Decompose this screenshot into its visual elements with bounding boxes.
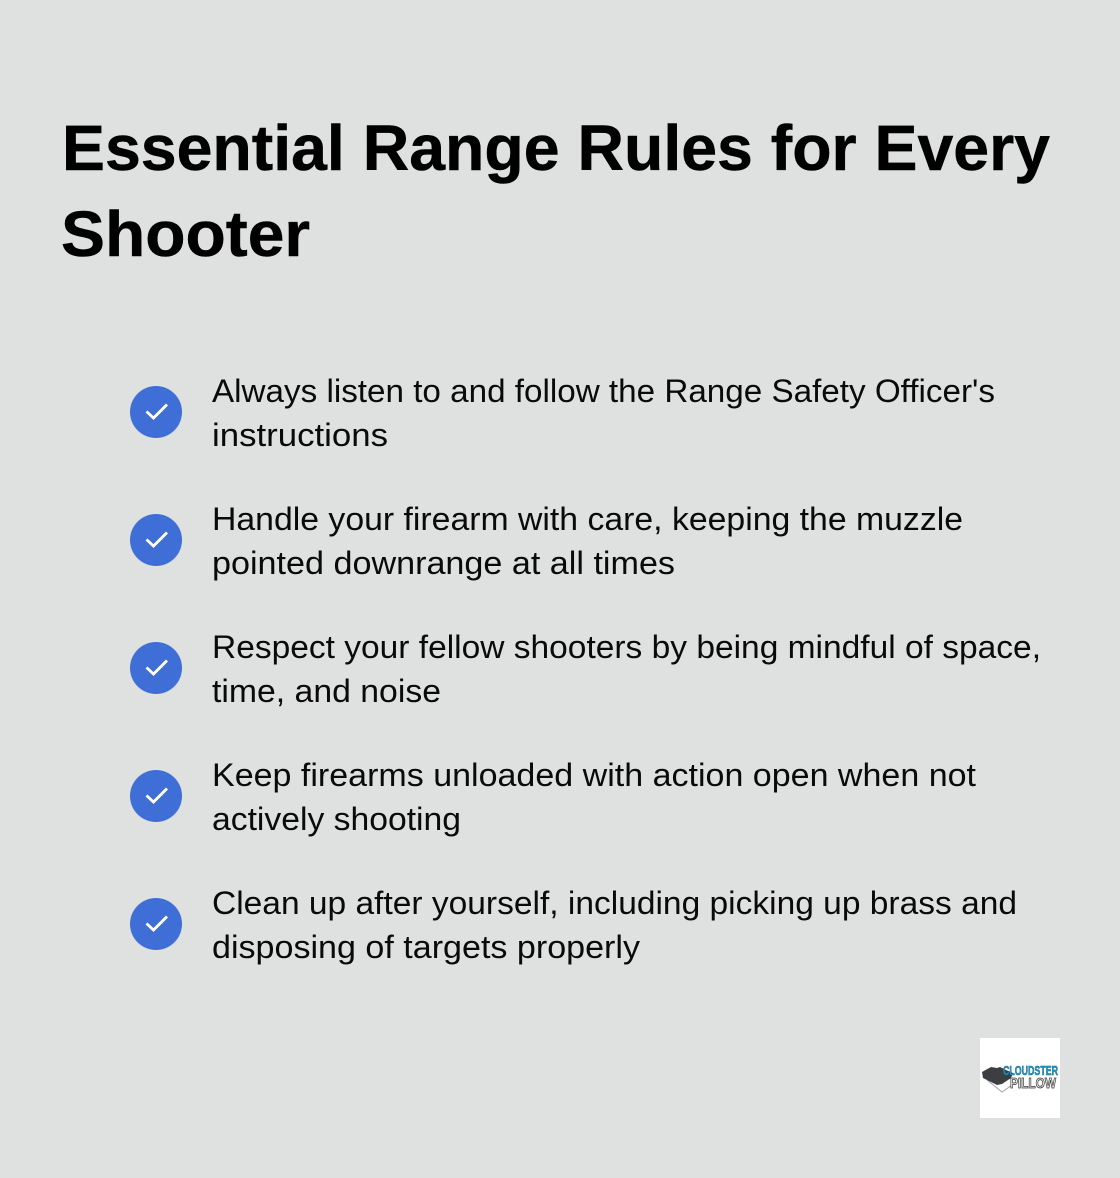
- icon: check 1: [130, 386, 182, 438]
- rule 1 text: Always listen to and follow the Range Safety Officer's: [212, 373, 995, 409]
- rule 5 text: [212, 885, 1017, 965]
- rule 3: [130, 629, 1041, 709]
- logo wordmark: PILLOW: [1010, 1075, 1057, 1092]
- icon: check 2: [130, 514, 182, 566]
- rule 1: [130, 373, 995, 453]
- logo: [980, 1038, 1060, 1118]
- logo wordmark: [1003, 1064, 1058, 1092]
- rule 4 text: actively shooting: [212, 801, 461, 837]
- icon: check 5: [130, 898, 182, 950]
- rule 2 text: [212, 501, 963, 581]
- rule 3 text: time, and noise: [212, 673, 441, 709]
- title: [61, 112, 1050, 270]
- logo wordmark: CLOUDSTER: [1003, 1064, 1058, 1078]
- rule 1 text: instructions: [212, 417, 388, 453]
- rule 5 text: disposing of targets properly: [212, 929, 640, 965]
- rule 3 text: Respect your fellow shooters by being mindful of space,: [212, 629, 1041, 665]
- icon: check 4: [130, 770, 182, 822]
- rule 2: [130, 501, 963, 581]
- rule 5 text: Clean up after yourself, including picking up brass and: [212, 885, 1017, 921]
- rule 3 text: [212, 629, 1041, 709]
- rule 5: [130, 885, 1017, 965]
- title: Essential Range Rules for Every: [62, 112, 1050, 184]
- rule 2 text: pointed downrange at all times: [212, 545, 675, 581]
- rule 2 text: Handle your firearm with care, keeping the muzzle: [212, 501, 963, 537]
- rule 4: [130, 757, 976, 837]
- icon: pillow: [982, 1067, 1013, 1092]
- icon: check 3: [130, 642, 182, 694]
- rule 4 text: Keep firearms unloaded with action open when not: [212, 757, 976, 793]
- rule 4 text: [212, 757, 976, 837]
- rule 1 text: [212, 373, 995, 453]
- title: Shooter: [61, 198, 310, 270]
- checklist: [130, 373, 1041, 965]
